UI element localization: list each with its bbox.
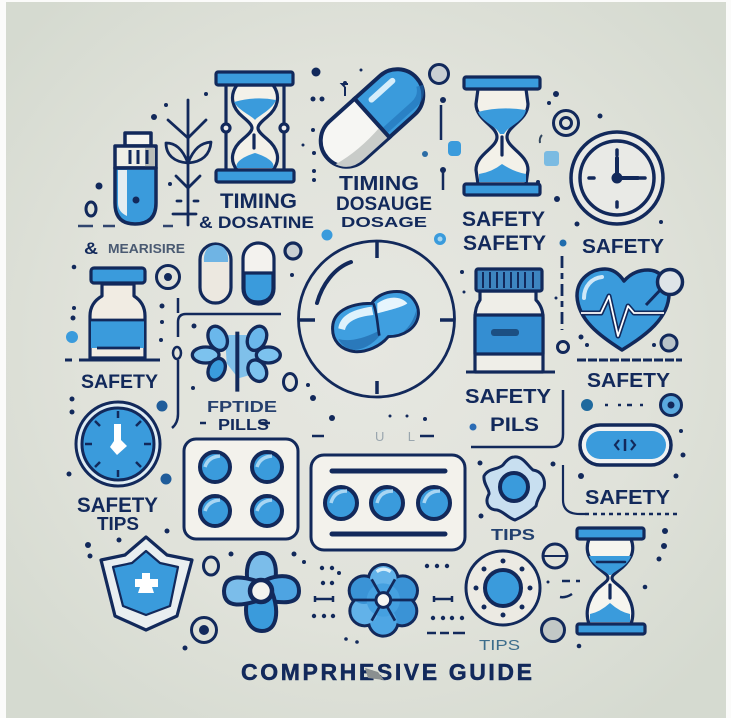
label: garbled left: MEARISIRE	[108, 241, 185, 256]
label: safety safety	[462, 208, 546, 255]
label: timing and dosatine: TIMING	[220, 190, 297, 213]
icon: blue clock	[76, 402, 160, 486]
title: comprehensive guide: COMPRHESIVE GUIDE	[241, 659, 532, 685]
icon: dial with pill	[466, 551, 540, 625]
icon: hourglass bottom right	[577, 528, 645, 634]
label: safety pils: SAFETY	[465, 386, 552, 408]
label: timing and dosatine	[199, 190, 314, 232]
title smudge	[365, 668, 384, 680]
label: tips middle: TIPS	[491, 527, 535, 544]
icon: heart with pulse	[577, 269, 682, 350]
label: fptide pills: FPTIDE	[207, 399, 277, 416]
icon: left bottle	[65, 268, 160, 360]
bracket: right upper	[471, 390, 563, 447]
label: timing dosauge dosage: DOSAUGE	[336, 194, 432, 215]
label: timing dosauge dosage: TIMING	[339, 173, 419, 195]
label: timing dosauge dosage: DOSAGE	[341, 214, 427, 231]
icon: hourglass top right	[464, 77, 540, 195]
icon: wall clock	[571, 132, 663, 224]
label: tips bottom: TIPS	[479, 637, 520, 654]
icon: large capsule	[310, 59, 434, 177]
decorative dots	[66, 68, 686, 650]
label: safety safety: SAFETY	[463, 232, 546, 255]
icon: supplement bottle right	[466, 269, 555, 372]
label: timing dosauge dosage	[336, 173, 432, 231]
label: safety tips: SAFETY	[77, 494, 158, 517]
decorative blue dots	[66, 141, 593, 430]
label: safety by clock: SAFETY	[582, 236, 665, 258]
icon: vial / tube	[115, 133, 156, 224]
label: garbled left: &	[84, 239, 98, 258]
icon: target ring	[156, 266, 180, 288]
icon: peptide flower	[192, 323, 280, 392]
label: safety tips: TIPS	[97, 514, 139, 534]
label: garbled left	[84, 239, 185, 258]
label: safety safety: SAFETY	[462, 208, 545, 231]
central dial with double pill	[298, 241, 455, 397]
label: fptide pills: PILLS	[218, 417, 269, 434]
icon: two small pills	[200, 243, 274, 304]
icon: gear flower	[484, 457, 544, 520]
label: safety tips	[77, 494, 158, 534]
icon: shield star	[101, 537, 192, 630]
icon: blister pack four pills	[184, 439, 298, 539]
decorative rings and small icons	[86, 64, 682, 642]
icon: horizontal capsule	[580, 425, 671, 465]
icon: round flower	[348, 563, 419, 638]
label: safety pils: PILS	[490, 415, 539, 436]
label: safety pils	[465, 386, 552, 436]
icon: small ring with pin	[285, 243, 301, 277]
icon: blister pack three pills	[311, 455, 465, 550]
label: timing and dosatine: & DOSATINE	[199, 213, 314, 232]
icon: plant sprig	[166, 100, 211, 225]
label: safety left: SAFETY	[81, 372, 158, 393]
label: safety right: SAFETY	[587, 370, 671, 392]
icon: hourglass top left	[216, 72, 294, 182]
label: fptide pills	[207, 399, 277, 434]
icon: fan flower	[224, 553, 299, 631]
bracket: right lower	[563, 465, 585, 514]
label: safety lower right: SAFETY	[585, 487, 671, 509]
divider under vial	[78, 225, 173, 227]
bracket: left	[172, 298, 281, 428]
faint label: guide: U L	[375, 429, 415, 444]
